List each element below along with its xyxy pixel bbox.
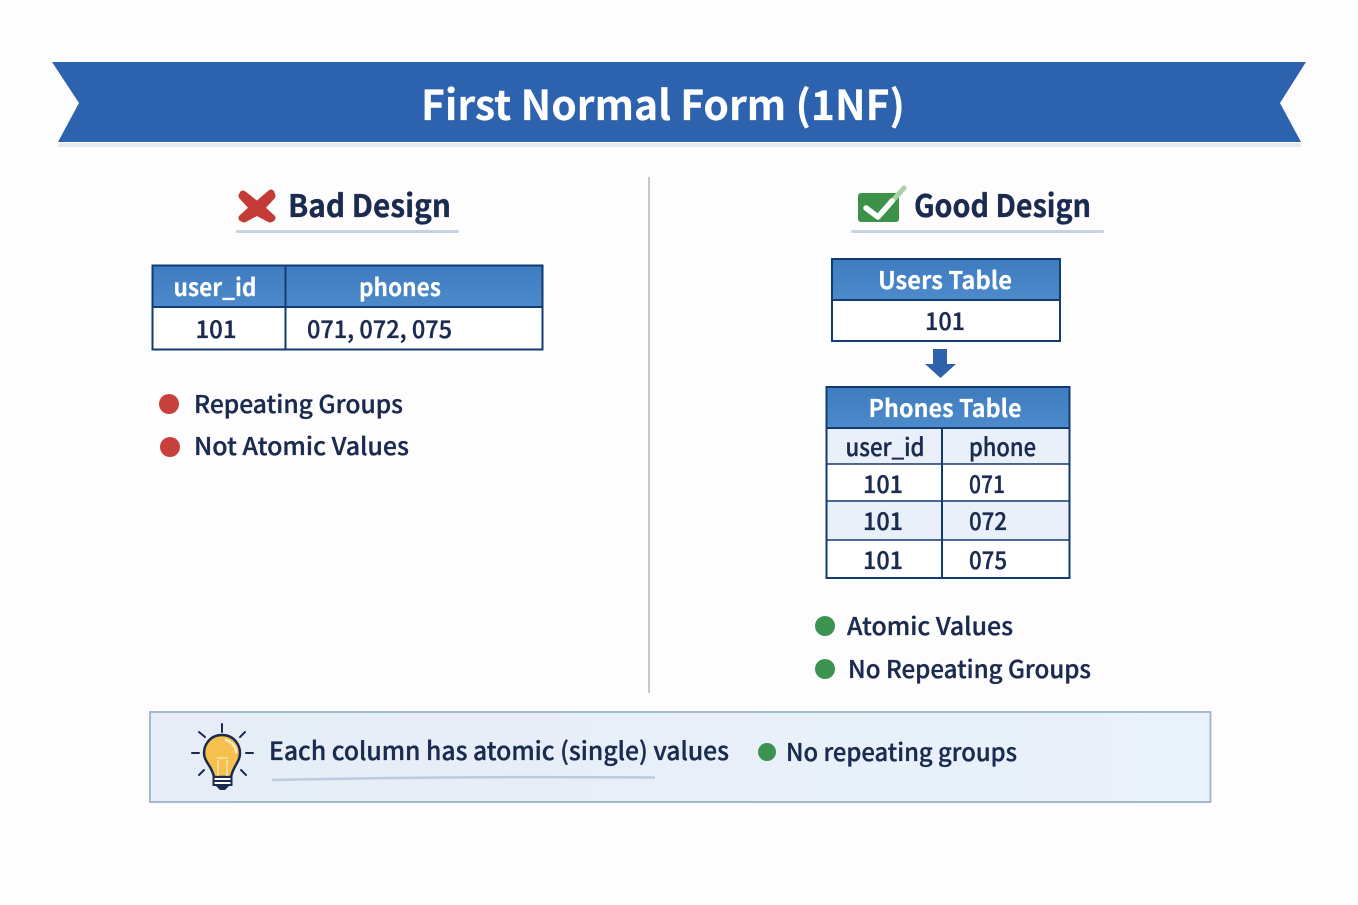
title banner xyxy=(52,62,1306,147)
arrow: users to phones xyxy=(925,349,956,378)
heading: bad design xyxy=(236,181,459,233)
callout text 2: No repeating groups xyxy=(786,734,1017,769)
table: phones: 075 xyxy=(969,542,1007,577)
list: bad design problems xyxy=(159,386,409,463)
table: phones xyxy=(826,387,1070,578)
heading: good design: Good Design xyxy=(914,181,1091,226)
list: good design benefits: No Repeating Groups xyxy=(848,651,1091,686)
title: First Normal Form (1NF) xyxy=(421,72,905,132)
table: phones: Phones Table xyxy=(868,390,1022,425)
table: bad design: 101 xyxy=(196,311,236,346)
table: users: Users Table xyxy=(878,262,1012,297)
table: bad design: 071, 072, 075 xyxy=(307,311,452,346)
table: bad design: phones xyxy=(359,269,441,304)
center divider xyxy=(648,177,650,693)
table: bad design: user_id xyxy=(174,269,256,304)
list: bad design problems: Not Atomic Values xyxy=(194,428,409,463)
callout text: Each column has atomic (single) values xyxy=(269,732,729,768)
table: users xyxy=(832,259,1060,341)
table: phones: user_id xyxy=(846,429,924,464)
callout underline xyxy=(272,777,655,780)
table: phones: 072 xyxy=(969,503,1007,538)
heading: bad design: Bad Design xyxy=(288,181,451,226)
list: bad design problems: Repeating Groups xyxy=(194,386,403,421)
panel: bad design xyxy=(152,181,543,463)
list: good design benefits xyxy=(815,608,1091,686)
table: bad design xyxy=(152,265,543,350)
list: good design benefits: Atomic Values xyxy=(847,608,1013,643)
table: phones: phone xyxy=(969,429,1036,464)
callout: summary xyxy=(150,712,1210,802)
table: phones: 101 xyxy=(863,466,903,501)
heading: good design xyxy=(851,181,1104,233)
table: phones: 101 xyxy=(863,542,903,577)
table: users: 101 xyxy=(925,303,965,338)
icon: light bulb xyxy=(192,724,253,790)
icon: green check xyxy=(858,188,904,222)
table: phones: 101 xyxy=(863,503,903,538)
icon: red cross xyxy=(242,193,272,219)
bullet xyxy=(758,743,776,761)
panel: good design xyxy=(815,181,1104,686)
table: phones: 071 xyxy=(969,466,1005,501)
